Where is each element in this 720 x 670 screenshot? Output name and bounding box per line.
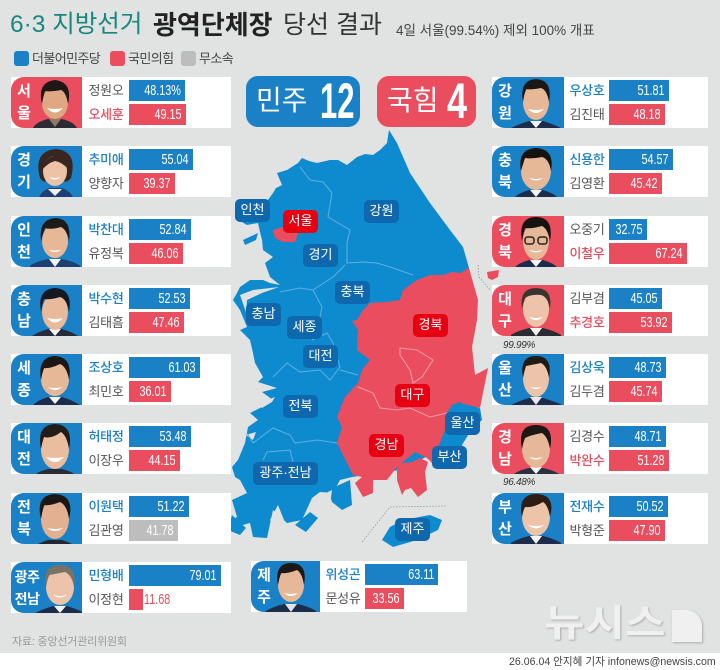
bar: 48.71 xyxy=(609,426,666,447)
panel: 대구: 구 xyxy=(498,313,512,330)
candidate: 조상호: 조상호 xyxy=(88,360,123,375)
bar: 51.28 xyxy=(609,450,669,471)
panel: 충북 xyxy=(492,146,708,197)
map label: 울산 xyxy=(445,412,480,435)
bar: 46.06: 46.06 xyxy=(152,245,179,262)
bar: 61.03: 61.03 xyxy=(169,359,196,376)
panel: 전북: 북 xyxy=(17,521,31,538)
seat count: 민주 12 xyxy=(246,76,360,127)
map label: 전북: 전북 xyxy=(289,398,312,413)
candidate: 박완수: 박완수 xyxy=(570,453,604,468)
candidate: 박수현: 박수현 xyxy=(88,291,123,306)
map label: 전북 xyxy=(283,395,318,418)
panel: 인천: 인 xyxy=(17,222,31,239)
bar: 52.84: 52.84 xyxy=(160,221,187,238)
map label: 광주·전남: 광주·전남 xyxy=(259,465,312,480)
map label: 강원: 강원 xyxy=(370,203,393,218)
bar: 51.22 xyxy=(129,496,189,517)
bar: 67.24: 67.24 xyxy=(656,245,683,262)
map label: 충남: 충남 xyxy=(252,306,275,321)
candidate: 추미애: 추미애 xyxy=(88,152,123,167)
panel: 경남: 남 xyxy=(498,451,512,468)
bar: 45.05: 45.05 xyxy=(631,290,658,307)
panel: 부산: 산 xyxy=(498,521,512,538)
bar: 54.57 xyxy=(609,149,673,170)
bar: 46.06 xyxy=(129,243,183,264)
map label: 인천: 인천 xyxy=(241,202,264,217)
bar: 48.73: 48.73 xyxy=(635,359,662,376)
panel: 서울: 울 xyxy=(17,105,31,122)
candidate: 양향자: 양향자 xyxy=(88,176,123,191)
map label: 경북 xyxy=(413,314,448,337)
map: red provinces 경북 대구 경남 xyxy=(337,268,488,497)
bar: 53.92: 53.92 xyxy=(641,314,668,331)
bar: 48.73 xyxy=(609,357,666,378)
panel: 경기 xyxy=(11,146,231,197)
map label: 서울 xyxy=(283,210,318,233)
bar: 47.90 xyxy=(609,520,665,541)
seat count: 민주 12: 12 xyxy=(320,73,354,129)
panel: 대전: 대 xyxy=(17,429,31,446)
map label: 부산: 부산 xyxy=(438,449,461,464)
seat count: 민주 12: 민주 xyxy=(256,85,308,116)
candidate: 신용한: 신용한 xyxy=(570,152,604,167)
panel: 전북 xyxy=(11,493,231,544)
panel: 세종: 세 xyxy=(17,360,31,377)
map label: 경남: 경남 xyxy=(375,437,398,452)
bar: 79.01 xyxy=(129,565,221,586)
candidate: 문성유: 문성유 xyxy=(326,591,360,606)
map label: 광주·전남 xyxy=(253,462,318,485)
bar: 51.28: 51.28 xyxy=(638,452,665,469)
bar: 54.57: 54.57 xyxy=(642,151,669,168)
bar: 48.71: 48.71 xyxy=(635,428,662,445)
map: Ulleung island xyxy=(487,270,499,280)
candidate: 이장우: 이장우 xyxy=(88,453,123,468)
seat count: 국힘 4 xyxy=(377,76,476,127)
candidate: 오세훈: 오세훈 xyxy=(88,107,123,122)
map: Jeju island xyxy=(382,515,442,547)
bar: 39.37: 39.37 xyxy=(144,175,171,192)
bar: 47.90: 47.90 xyxy=(634,522,661,539)
bar: 52.53 xyxy=(129,288,190,309)
panel: 대전: 전 xyxy=(17,451,31,468)
map: Seoul xyxy=(273,227,298,242)
panel: 제주 xyxy=(251,561,467,612)
title: 광역단체장 xyxy=(153,10,273,40)
candidate: 이원택: 이원택 xyxy=(88,499,123,514)
panel: 인천: 천 xyxy=(17,244,31,261)
map label: 경기: 경기 xyxy=(309,247,332,262)
panel: 강원: 원 xyxy=(498,105,512,122)
panel: 울산: 울 xyxy=(498,360,512,377)
map label: 제주: 제주 xyxy=(401,521,424,536)
panel: 광주전남: 광주 xyxy=(15,569,39,585)
bar: 48.18: 48.18 xyxy=(634,106,661,123)
map label: 제주 xyxy=(395,518,430,541)
bar: 51.22: 51.22 xyxy=(158,498,185,515)
bar: 53.48: 53.48 xyxy=(160,428,187,445)
panel: 세종 xyxy=(11,354,231,405)
bar: 53.92 xyxy=(609,312,672,333)
bar: 39.37 xyxy=(129,173,175,194)
bar: 36.01: 36.01 xyxy=(140,383,167,400)
bar: 52.53: 52.53 xyxy=(159,290,186,307)
bar: 45.42: 45.42 xyxy=(631,175,658,192)
bar: 52.84 xyxy=(129,219,191,240)
bar: 55.04 xyxy=(129,149,193,170)
bar: 50.52: 50.52 xyxy=(637,498,664,515)
map label: 경북: 경북 xyxy=(419,317,442,332)
map label: 울산: 울산 xyxy=(451,415,474,430)
panel: 충남 xyxy=(11,285,231,336)
candidate: 김두겸: 김두겸 xyxy=(570,384,604,399)
candidate: 전재수: 전재수 xyxy=(570,499,604,514)
candidate: 유정복: 유정복 xyxy=(88,246,123,261)
panel: 충남: 충 xyxy=(17,291,31,308)
bar: 45.05 xyxy=(609,288,662,309)
map label: 부산 xyxy=(432,446,467,469)
map label: 대구: 대구 xyxy=(401,387,424,402)
candidate: 박형준: 박형준 xyxy=(570,523,604,538)
bar: 63.11: 63.11 xyxy=(408,566,434,583)
legend: 국민의힘 xyxy=(128,51,173,66)
legend xyxy=(14,51,234,66)
panel: 부산 xyxy=(492,493,708,544)
map label: 경남 xyxy=(369,434,404,457)
panel: 전북: 전 xyxy=(17,499,31,516)
title: 당선 결과 xyxy=(283,11,382,39)
bar: 50.52 xyxy=(609,496,668,517)
candidate: 정원오: 정원오 xyxy=(88,83,123,98)
note: 경남 개표율: 96.48% xyxy=(503,477,535,488)
bar: 45.74: 45.74 xyxy=(631,383,658,400)
map of South Korea xyxy=(231,130,499,547)
bar: 51.81: 51.81 xyxy=(638,82,665,99)
panel: 서울: 서 xyxy=(17,83,31,100)
bar: 47.46 xyxy=(129,312,184,333)
panel: 경북: 북 xyxy=(498,244,512,261)
bar: 44.15: 44.15 xyxy=(149,452,176,469)
bar: 33.56: 33.56 xyxy=(373,590,400,607)
map label: 대전 xyxy=(303,345,338,368)
candidate: 김진태: 김진태 xyxy=(570,107,604,122)
candidate: 김관영: 김관영 xyxy=(88,523,123,538)
bar: 45.42 xyxy=(609,173,662,194)
map label: 강원 xyxy=(364,200,399,223)
candidate: 추경호: 추경호 xyxy=(570,315,604,330)
byline: 26.06.04 안지혜 기자 infonews@newsis.com xyxy=(509,656,716,668)
map label: 대구 xyxy=(395,384,430,407)
map label: 충북: 충북 xyxy=(341,284,364,299)
panel: 충남: 남 xyxy=(17,313,31,330)
panel: 경기: 기 xyxy=(17,174,31,191)
map label: 충북 xyxy=(335,281,370,304)
seat count: 국힘 4: 4 xyxy=(447,73,467,129)
panel: 강원 xyxy=(492,77,708,128)
bar: 33.56 xyxy=(365,588,404,609)
seat count: 국힘 4: 국힘 xyxy=(387,85,439,116)
candidate: 김태흠: 김태흠 xyxy=(88,315,123,330)
panel: 부산: 부 xyxy=(498,499,512,516)
legend: 더불어민주당 xyxy=(32,51,100,66)
panel: 경북: 경 xyxy=(498,222,512,239)
bar: 49.15: 49.15 xyxy=(155,106,182,123)
candidate: 김영환: 김영환 xyxy=(570,176,604,191)
panel: 대구: 대 xyxy=(498,291,512,308)
panel: 대전 xyxy=(11,423,231,474)
source: 자료: 중앙선거관리위원회 xyxy=(12,636,127,648)
bar: 32.75 xyxy=(609,219,647,240)
panel: 충북: 북 xyxy=(498,174,512,191)
bar: 49.15 xyxy=(129,104,186,125)
bar: 44.15 xyxy=(129,450,180,471)
panel: 제주: 주 xyxy=(257,589,271,606)
map label: 경기 xyxy=(303,244,338,267)
panel: 충북: 충 xyxy=(498,152,512,169)
value: 11.68: 11.68 xyxy=(144,591,170,608)
map label: 충남 xyxy=(246,303,281,326)
bar: 41.78 xyxy=(129,520,178,541)
candidate: 민형배: 민형배 xyxy=(88,568,123,583)
map label: 세종 xyxy=(287,316,322,339)
logo: 뉴시스: 뉴시스 xyxy=(544,603,665,644)
title xyxy=(10,10,382,40)
panel: 울산: 산 xyxy=(498,382,512,399)
bar: 51.81 xyxy=(609,80,669,101)
candidate: 오중기: 오중기 xyxy=(570,222,604,237)
map label: 대전: 대전 xyxy=(309,348,332,363)
candidate: 김경수: 김경수 xyxy=(570,429,604,444)
panel: 경기: 경 xyxy=(17,152,31,169)
panel: 광주전남: 전남 xyxy=(15,591,39,607)
candidate: 최민호: 최민호 xyxy=(88,384,123,399)
candidate: 박찬대: 박찬대 xyxy=(88,222,123,237)
candidate: 우상호: 우상호 xyxy=(570,83,604,98)
bar: 79.01: 79.01 xyxy=(190,567,217,584)
bar: 67.24 xyxy=(609,243,687,264)
panel: 경북 xyxy=(492,216,708,267)
candidate: 위성곤: 위성곤 xyxy=(326,567,360,582)
candidate: 김부겸: 김부겸 xyxy=(570,291,604,306)
note: 대구 개표율: 99.99% xyxy=(503,340,535,351)
bar: 55.04: 55.04 xyxy=(162,151,189,168)
bar: 47.46: 47.46 xyxy=(153,314,180,331)
bar: 45.74 xyxy=(609,381,662,402)
title: 6·3 지방선거 xyxy=(10,11,142,38)
candidate: 이철우: 이철우 xyxy=(570,246,604,261)
bar: 48.13%: 48.13% xyxy=(144,82,181,99)
panel: 경남: 경 xyxy=(498,429,512,446)
panel: 대구 xyxy=(492,285,708,336)
candidate: 이정현: 이정현 xyxy=(88,592,123,607)
bar: 11.68 xyxy=(129,589,143,610)
bar: 48.18 xyxy=(609,104,665,125)
panel: 울산 xyxy=(492,354,708,405)
map: inlet cuts xyxy=(240,287,480,528)
bar: 48.13% xyxy=(129,80,185,101)
bar: 61.03 xyxy=(129,357,200,378)
bar: 53.48 xyxy=(129,426,191,447)
panel: 서울 xyxy=(11,77,231,128)
legend: 무소속 xyxy=(199,51,233,66)
map label: 서울: 서울 xyxy=(289,213,312,228)
map: Ulsan and Busan xyxy=(432,402,482,468)
map label: 세종: 세종 xyxy=(293,319,316,334)
candidate: 허태정: 허태정 xyxy=(88,429,123,444)
map: blue provinces xyxy=(228,130,480,538)
panel: 제주: 제 xyxy=(257,567,271,584)
bar: 63.11 xyxy=(365,564,438,585)
subtitle: 4일 서울(99.54%) 제외 100% 개표 xyxy=(396,23,595,38)
bar: 32.75: 32.75 xyxy=(616,221,643,238)
panel: 광주전남 xyxy=(11,562,231,613)
map label: 인천 xyxy=(235,199,270,222)
candidate: 김상욱: 김상욱 xyxy=(570,360,604,375)
bar: 36.01 xyxy=(129,381,171,402)
panel: 강원: 강 xyxy=(498,83,512,100)
panel: 경남 xyxy=(492,423,708,474)
panel: 인천 xyxy=(11,216,231,267)
bar: 41.78: 41.78 xyxy=(147,522,174,539)
panel: 세종: 종 xyxy=(17,382,31,399)
